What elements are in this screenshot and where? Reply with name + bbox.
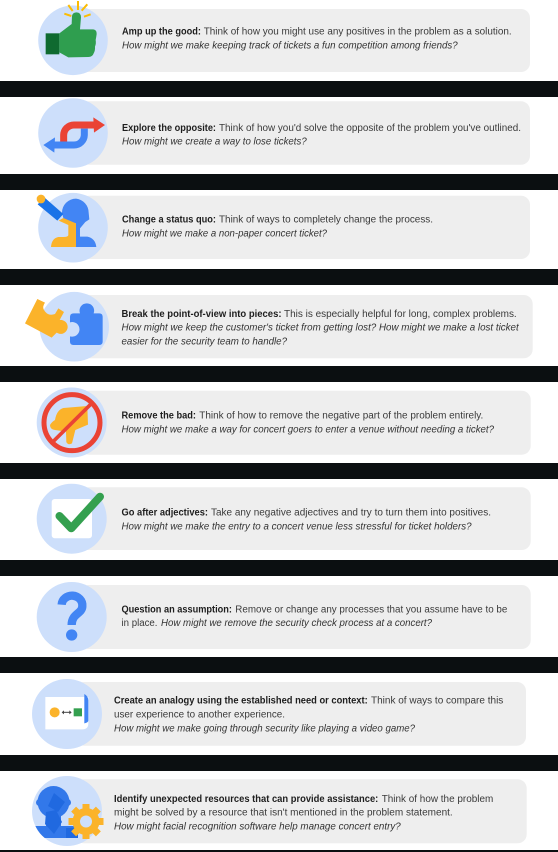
text: create an analogy: Think of ways to compare this bbox=[371, 695, 503, 706]
text: remove the bad bbox=[122, 410, 494, 435]
panel: go after adjectives bbox=[37, 484, 531, 554]
text: identify unexpected resources: How might facial recognition software help manage concert entry? bbox=[114, 821, 401, 832]
icon: person with gear bbox=[30, 786, 104, 839]
text: explore the opposite: Explore the opposite: bbox=[122, 123, 216, 134]
icon: person with pencil bbox=[37, 195, 96, 247]
text: remove the bad: Think of how to remove the negative part of the problem entirely. bbox=[199, 410, 483, 421]
panel: break the point-of-view bbox=[25, 292, 533, 362]
text: identify unexpected resources: might be solved by a resource that isn't mentioned in the problem statement. bbox=[114, 808, 453, 818]
icon detail: gear bbox=[68, 804, 104, 839]
text: break the point-of-view: easier for the security team to handle? bbox=[122, 336, 287, 347]
panel: create an analogy bbox=[32, 679, 526, 749]
text: question an assumption: Question an assumption: bbox=[122, 604, 232, 615]
text: amp up the good: Think of how you might use any positives in the problem as a solution. bbox=[204, 27, 512, 38]
text: break the point-of-view: This is especially helpful for long, complex problems. bbox=[284, 309, 517, 320]
panel: explore the opposite bbox=[38, 98, 530, 168]
text: change a status quo: How might we make a non-paper concert ticket? bbox=[122, 228, 327, 239]
text: go after adjectives: Go after adjectives: bbox=[122, 508, 208, 519]
icon: question mark bbox=[62, 596, 82, 641]
panel: identify unexpected resources bbox=[30, 776, 527, 846]
text: identify unexpected resources: Think of how the problem bbox=[382, 794, 493, 805]
text: question an assumption: Remove or change any processes that you assume have to be bbox=[235, 604, 508, 615]
text: change a status quo bbox=[122, 215, 433, 239]
text: amp up the good: How might we make keeping track of tickets a fun competition among friends? bbox=[122, 41, 458, 52]
text: explore the opposite: How might we create a way to lose tickets? bbox=[122, 137, 307, 148]
text: identify unexpected resources: Identify unexpected resources that can provide assistance: bbox=[114, 794, 378, 805]
text: explore the opposite bbox=[122, 123, 521, 148]
text: go after adjectives bbox=[122, 508, 491, 533]
panel: change a status quo bbox=[37, 193, 530, 262]
text: remove the bad: Remove the bad: bbox=[122, 410, 196, 421]
icon: opposite arrows bbox=[43, 117, 105, 153]
text: break the point-of-view: Break the point-of-view into pieces: bbox=[122, 309, 282, 320]
text: explore the opposite: Think of how you'd solve the opposite of the problem you've outlined. bbox=[219, 123, 521, 134]
text: create an analogy: Create an analogy using the established need or context: bbox=[114, 695, 368, 706]
text: identify unexpected resources bbox=[114, 794, 493, 832]
panel: remove the bad bbox=[37, 388, 531, 458]
icon: checkbox with check mark bbox=[52, 497, 100, 538]
text: question an assumption bbox=[122, 604, 508, 629]
icon: puzzle pieces bbox=[25, 299, 103, 345]
text: create an analogy: How might we make going through security like playing a video game? bbox=[114, 723, 415, 734]
icon: thumbs up with sparkle bbox=[46, 1, 97, 57]
text: go after adjectives: How might we make the entry to a concert venue less stressful for ticket holders? bbox=[122, 522, 472, 533]
text: break the point-of-view bbox=[122, 309, 520, 347]
text: change a status quo: Think of ways to completely change the process. bbox=[219, 215, 433, 226]
text: question an assumption: in place. bbox=[122, 618, 158, 629]
text: create an analogy: user experience to another experience. bbox=[114, 710, 285, 720]
text: amp up the good bbox=[122, 27, 512, 52]
text: amp up the good: Amp up the good: bbox=[122, 27, 201, 38]
text: go after adjectives: Take any negative adjectives and try to turn them into positives. bbox=[211, 508, 491, 519]
text: break the point-of-view: How might we keep the customer's ticket from getting lost? How might we make a lost ticket bbox=[122, 323, 520, 334]
icon: crossed out thumbs down bbox=[44, 395, 100, 451]
panel: amp up the good bbox=[38, 1, 530, 75]
text: create an analogy bbox=[114, 695, 503, 734]
icon: analogy card bbox=[45, 694, 88, 729]
text: remove the bad: How might we make a way for concert goers to enter a venue without needing a ticket? bbox=[122, 424, 494, 435]
text: change a status quo: Change a status quo: bbox=[122, 215, 216, 226]
panel: question an assumption bbox=[37, 582, 531, 652]
text: question an assumption: How might we remove the security check process at a concert? bbox=[161, 618, 432, 629]
